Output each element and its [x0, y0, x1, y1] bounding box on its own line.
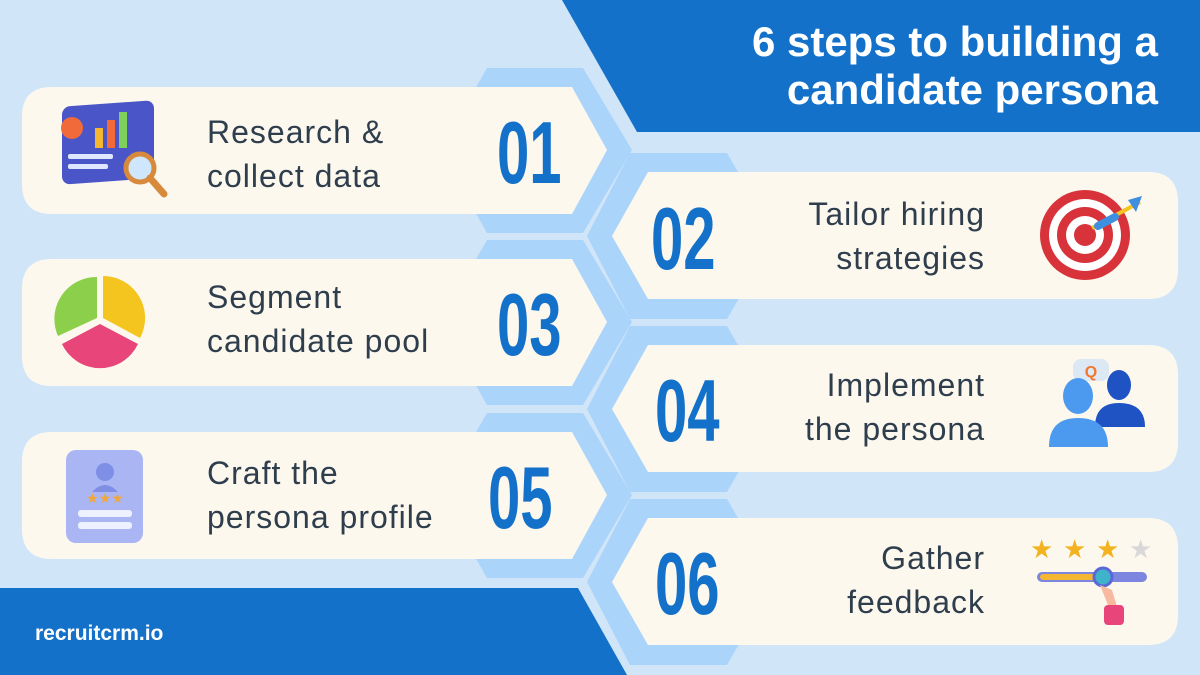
- step 01 card: collect data: [207, 158, 381, 194]
- step 06 card: [587, 499, 1178, 665]
- step 05 card: [22, 413, 632, 578]
- title banner: [562, 0, 1200, 132]
- title banner: candidate persona: [787, 66, 1159, 113]
- icon: rating slider: ★: [1129, 535, 1152, 565]
- footer banner: recruitcrm.io: [35, 622, 163, 645]
- icon: two people: [1049, 359, 1145, 447]
- icon: profile card: [66, 450, 143, 543]
- step 01 card: [22, 68, 632, 233]
- step 03 card: 03: [497, 276, 562, 374]
- step 03 card: candidate pool: [207, 323, 429, 359]
- step 01 card: Research &: [207, 114, 384, 150]
- step 03 card: Segment: [207, 279, 342, 315]
- step 02 card: Tailor hiring: [808, 196, 985, 232]
- step 01 card: 01: [497, 104, 562, 202]
- step 05 card: Craft the: [207, 455, 339, 491]
- step 02 card: [587, 153, 1178, 319]
- icon: two people: Q: [1085, 364, 1097, 381]
- icon: pie chart: [54, 276, 145, 368]
- step 04 card: [587, 326, 1178, 492]
- icon: report with magnifier: [61, 100, 164, 194]
- step 04 card: 04: [655, 362, 720, 460]
- icon: rating slider: ★: [1030, 535, 1053, 565]
- step 02 card: 02: [651, 190, 716, 288]
- title banner: 6 steps to building a: [752, 18, 1159, 65]
- icon: rating slider: [1030, 535, 1152, 625]
- step 05 card: 05: [488, 449, 553, 547]
- icon: target: [1040, 190, 1142, 280]
- step 05 card: persona profile: [207, 499, 434, 535]
- icon: rating slider: ★: [1096, 535, 1119, 565]
- step 04 card: Implement: [827, 367, 985, 403]
- icon: rating slider: ★: [1063, 535, 1086, 565]
- icon: profile card: ★★★: [86, 491, 124, 507]
- step 03 card: [22, 240, 632, 405]
- step 04 card: the persona: [805, 411, 985, 447]
- step 02 card: strategies: [836, 240, 985, 276]
- step 06 card: 06: [655, 535, 720, 633]
- step 06 card: feedback: [847, 584, 985, 620]
- step 06 card: Gather: [881, 540, 985, 576]
- footer banner: [0, 588, 627, 675]
